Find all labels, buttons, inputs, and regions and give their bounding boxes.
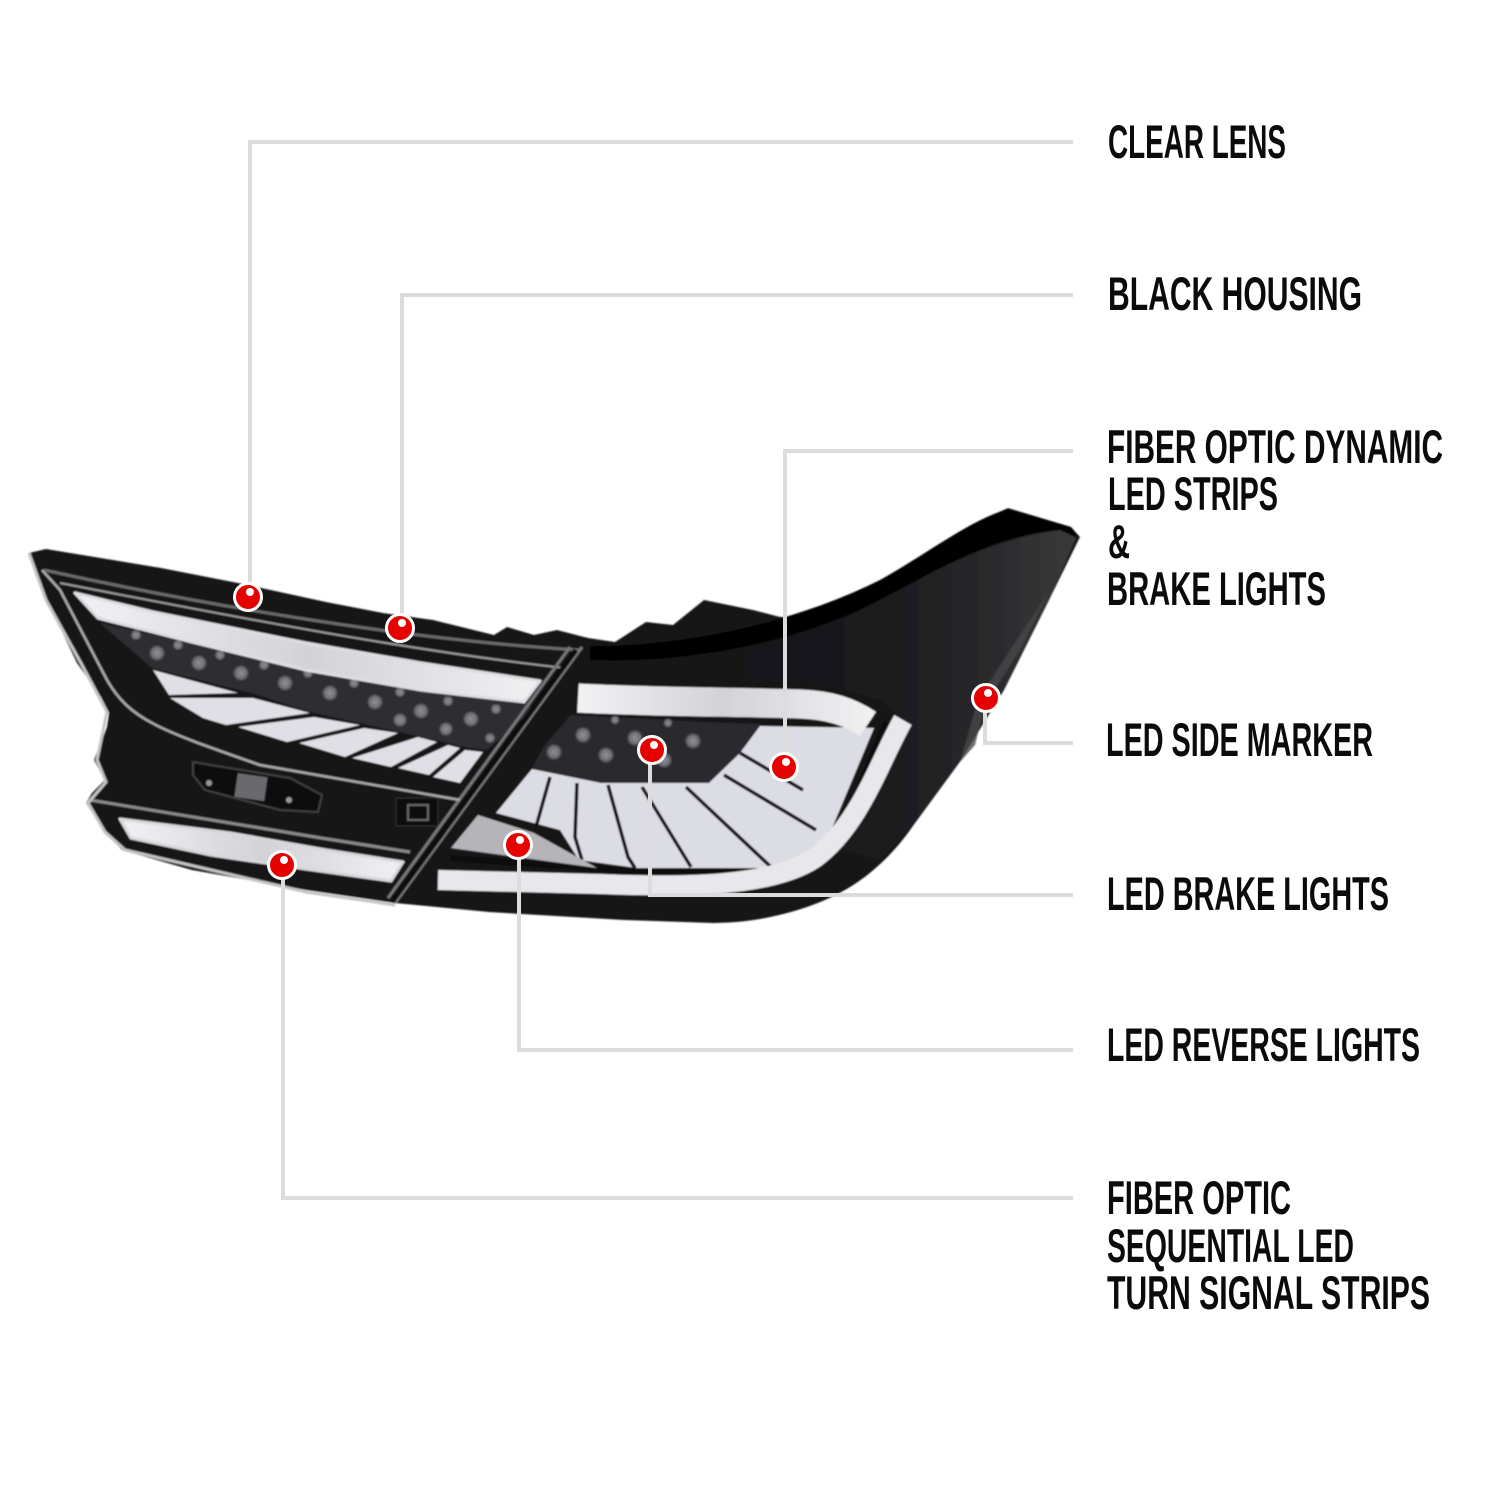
honeycomb LED field left <box>100 623 536 750</box>
label: clear lens: CLEAR LENS <box>1108 115 1286 168</box>
marker: clear lens <box>234 584 262 610</box>
honeycomb LED field right <box>532 715 760 783</box>
leader lines <box>250 142 1073 1198</box>
upper left housing trim <box>44 570 580 650</box>
label: fiber optic dynamic LED strips and brake lights: LED STRIPS <box>1108 467 1278 520</box>
label: black housing: BLACK HOUSING <box>1108 267 1362 320</box>
marker: side marker <box>972 684 1000 712</box>
upper light strip left <box>75 593 540 702</box>
glossy black upper band <box>590 509 1078 661</box>
product: tail light assembly <box>29 508 1080 923</box>
marker: turn signal <box>268 852 296 878</box>
lens divider <box>388 647 582 903</box>
label: fiber optic sequential LED turn signal strips: FIBER OPTIC <box>1107 1171 1291 1224</box>
wiring connector <box>193 762 322 812</box>
label: fiber optic dynamic LED strips and brake lights: BRAKE LIGHTS <box>1107 562 1326 615</box>
small socket <box>396 798 438 826</box>
right fan slats <box>536 753 816 868</box>
label: fiber optic dynamic LED strips and brake lights <box>1107 420 1443 615</box>
marker: brake lights <box>638 736 666 764</box>
lower light strip left <box>120 819 403 881</box>
right fan light field <box>496 726 874 868</box>
side reflector highlight <box>960 592 1049 762</box>
marker: black housing <box>386 614 414 642</box>
left fan light blades <box>153 670 483 783</box>
reverse lens <box>451 815 597 868</box>
right fan inner frame <box>450 722 886 872</box>
marker: reverse lights <box>504 832 532 858</box>
marker: fiber optic dynamic <box>770 754 798 780</box>
clear lens edge <box>42 570 460 800</box>
housing silhouette <box>29 508 1080 923</box>
label: fiber optic dynamic LED strips and brake lights: & <box>1108 515 1130 568</box>
label: fiber optic sequential LED turn signal strips <box>1107 1171 1430 1319</box>
lower lens gloss line <box>90 800 410 852</box>
upper light strip right <box>578 698 868 724</box>
lower light strip right <box>438 720 903 885</box>
matte right body <box>590 530 1076 860</box>
LED dots <box>130 629 702 769</box>
